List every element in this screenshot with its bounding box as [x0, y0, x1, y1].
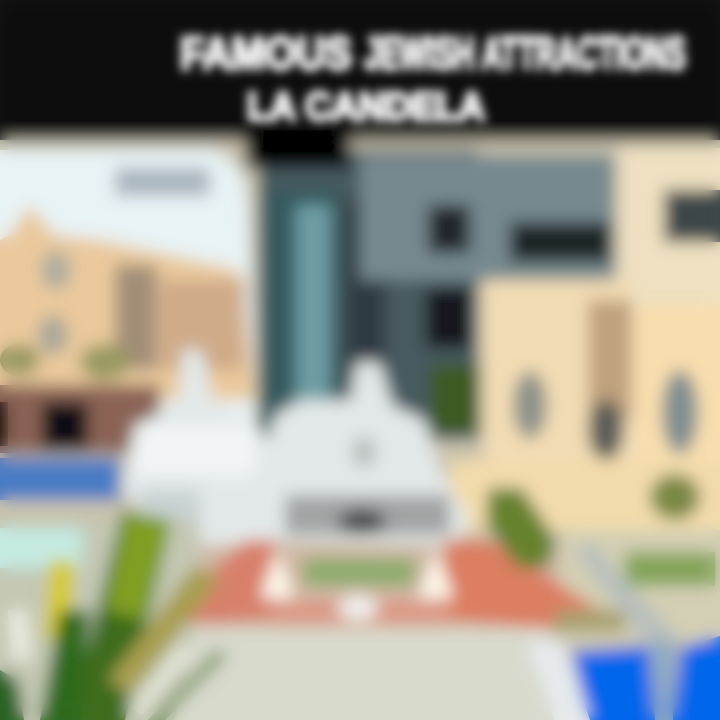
title [180, 27, 686, 129]
black header band [0, 0, 720, 140]
lower ground and gardens [0, 520, 720, 720]
right cream building [450, 148, 720, 530]
hedges and planters [260, 474, 700, 650]
centre glass tower [258, 150, 615, 440]
dark gap below header [245, 130, 350, 168]
blue pool [526, 636, 720, 720]
title: LA CANDELA [247, 85, 485, 129]
palm fronds [0, 510, 228, 720]
white central palace [122, 350, 470, 550]
left sky and building [0, 150, 255, 500]
title: FAMOUS [180, 27, 352, 79]
